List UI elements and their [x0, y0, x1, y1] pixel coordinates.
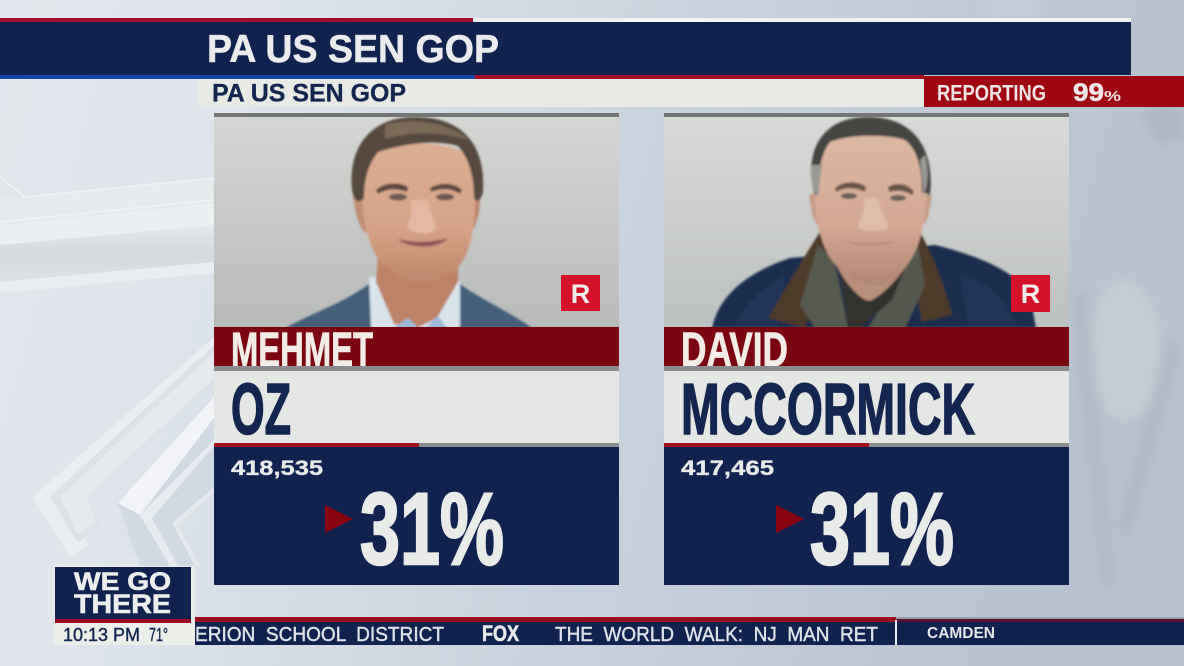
last name bar: MCCORMICK: [681, 370, 975, 450]
reporting percent: 99: [1073, 79, 1104, 107]
FOX logo: FOX: [482, 621, 519, 646]
slogan line 1: WE GO: [74, 568, 171, 596]
ticker location: CAMDEN: [927, 625, 995, 642]
results block: [214, 447, 619, 586]
title text: PA US SEN GOP: [207, 28, 499, 71]
top title bar: [0, 18, 1131, 79]
temperature: 71°: [149, 625, 168, 645]
party badge: R: [561, 275, 600, 311]
vote percent: 31%: [360, 472, 504, 586]
slogan line 2: THERE: [74, 589, 171, 619]
vote count: 417,465: [681, 456, 774, 480]
ticker headline 1: ERION SCHOOL DISTRICT: [195, 624, 444, 646]
portrait: Mehmet Oz: [214, 117, 619, 328]
party badge: R: R: [571, 279, 590, 309]
vote percent: 31%: [810, 472, 954, 586]
party badge: R: [1011, 275, 1050, 312]
panel: Mehmet Oz: [214, 113, 619, 586]
vote share progress bar: [214, 443, 619, 447]
party badge: R: R: [1021, 279, 1040, 309]
reporting label: REPORTING: [937, 80, 1046, 106]
leader arrow: [325, 505, 353, 533]
station logo: We Go There: [54, 566, 195, 645]
portrait: David McCormick: [664, 117, 1069, 328]
reporting badge: [924, 76, 1184, 107]
last name bar: [214, 370, 619, 450]
clock: 10:13 PM: [63, 625, 140, 645]
race subtitle strip: [197, 79, 924, 108]
news ticker: [195, 617, 1184, 646]
first name bar: [214, 327, 619, 371]
first name bar: [664, 327, 1069, 371]
subtitle text: PA US SEN GOP: [212, 80, 406, 108]
first name bar: DAVID: [681, 324, 788, 377]
ticker headline 2: THE WORLD WALK: NJ MAN RET: [555, 624, 878, 646]
leader arrow: [776, 505, 804, 533]
first name bar: MEHMET: [231, 324, 373, 377]
vote count: 418,535: [231, 456, 323, 480]
last name bar: OZ: [231, 370, 291, 450]
results block: [664, 447, 1069, 586]
vote share progress bar: [664, 443, 1069, 447]
percent sign: %: [1104, 88, 1121, 105]
panel: David McCormick: [664, 113, 1069, 586]
